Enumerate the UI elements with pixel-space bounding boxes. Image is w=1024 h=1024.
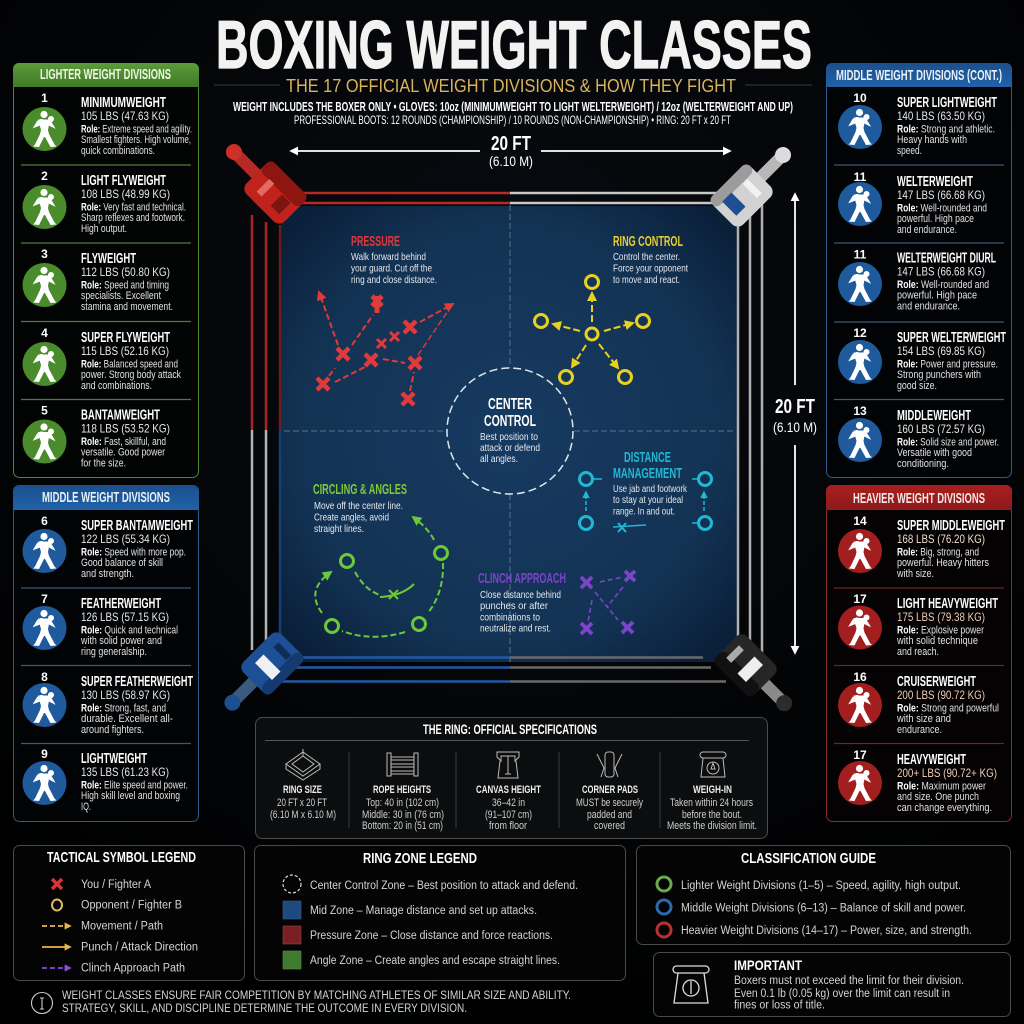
division 7: featherweight: 7 bbox=[41, 592, 48, 606]
division 4: super flyweight bbox=[22, 326, 181, 392]
legend: clinch approach path: Clinch Approach Path bbox=[81, 962, 185, 974]
footer note: WEIGHT CLASSES ENSURE FAIR COMPETITION BY MATCHING ATHLETES OF SIMILAR SIZE AND ABILITY. bbox=[62, 990, 571, 1002]
division 11: welterweight: 11 bbox=[854, 170, 867, 184]
legend: punch direction: Punch / Attack Direction bbox=[81, 942, 198, 954]
division 7: featherweight: with solid power and bbox=[80, 635, 162, 647]
panel: lighter weight divisions bbox=[13, 63, 199, 478]
division 17: heavyweight: Role: Maximum power bbox=[897, 780, 986, 792]
division 7: featherweight: FEATHERWEIGHT bbox=[81, 596, 161, 612]
legend: you / fighter a: You / Fighter A bbox=[81, 879, 151, 891]
division 7: featherweight: 126 LBS (57.15 KG) bbox=[81, 610, 169, 624]
division 6: super bantamweight: SUPER BANTAMWEIGHT bbox=[81, 518, 193, 534]
spec: canvas height bbox=[476, 752, 541, 832]
ring control diagram bbox=[534, 276, 650, 384]
spec: corner pads: covered bbox=[594, 820, 625, 832]
tactic: clinch approach: Close distance behind bbox=[480, 589, 561, 601]
division 13: middleweight: 160 LBS (72.57 KG) bbox=[897, 422, 985, 436]
division 10: super lightweight: speed. bbox=[897, 145, 922, 157]
tactic: distance management: Use jab and footwork bbox=[613, 483, 688, 495]
guide: lighter: Lighter Weight Divisions (1–5) – Speed, agility, high output. bbox=[681, 880, 961, 892]
tactic: clinch approach bbox=[478, 571, 635, 634]
tactic: pressure: Walk forward behind bbox=[351, 251, 426, 263]
distance diagram bbox=[580, 472, 712, 532]
panel: heavier weight divisions bbox=[826, 485, 1012, 822]
zone: pressure bbox=[283, 926, 553, 944]
panel: ring zone legend bbox=[254, 846, 626, 980]
callout: important: fines or loss of title. bbox=[734, 1000, 825, 1012]
division 11: welterweight: Role: Well-rounded and bbox=[897, 202, 987, 214]
division 1: minimumweight: Role: Extreme speed and agility. bbox=[81, 124, 192, 136]
division 8: super featherweight: SUPER FEATHERWEIGHT bbox=[81, 674, 193, 690]
division 11: welterweight: and endurance. bbox=[897, 224, 957, 236]
spec: ring size bbox=[270, 749, 336, 821]
division 7: featherweight: Role: Quick and technical bbox=[81, 624, 178, 636]
division 9: lightweight bbox=[22, 747, 188, 813]
spec: canvas height: (91–107 cm) bbox=[485, 809, 532, 821]
footer note bbox=[32, 990, 571, 1015]
division 2: light flyweight: 108 LBS (48.99 KG) bbox=[81, 187, 170, 201]
zone: center control: Center Control Zone – Best position to attack and defend. bbox=[310, 880, 578, 892]
corner post: white bbox=[708, 134, 804, 230]
panel: middle weight divisions: MIDDLE WEIGHT DIVISIONS bbox=[42, 490, 170, 506]
legend: movement path bbox=[42, 920, 163, 932]
division 13: middleweight: MIDDLEWEIGHT bbox=[897, 408, 971, 424]
tactic: clinch approach: neutralize and rest. bbox=[480, 622, 551, 634]
division 3: flyweight: specialists. Excellent bbox=[81, 290, 161, 302]
division 13: middleweight: Role: Solid size and power. bbox=[897, 436, 999, 448]
division 9: lightweight: IQ. bbox=[81, 801, 91, 813]
division 16: cruiserweight: 200 LBS (90.72 KG) bbox=[897, 688, 985, 702]
tactic: pressure: your guard. Cut off the bbox=[351, 262, 432, 274]
division 15: light heavyweight: Role: Explosive power bbox=[897, 624, 984, 636]
division 17: heavyweight: and size. One punch bbox=[897, 791, 979, 803]
division 7: featherweight bbox=[22, 592, 178, 658]
zone: angle: Angle Zone – Create angles and escape straight lines. bbox=[310, 955, 560, 967]
division 7: featherweight: ring generalship. bbox=[81, 646, 147, 658]
division 17: heavyweight: HEAVYWEIGHT bbox=[897, 752, 966, 768]
division 1: minimumweight: MINIMUMWEIGHT bbox=[81, 95, 166, 111]
division 4: super flyweight: SUPER FLYWEIGHT bbox=[81, 330, 170, 346]
panel: classification guide: CLASSIFICATION GUIDE bbox=[741, 850, 876, 867]
centre control zone: Best position to bbox=[480, 431, 538, 443]
division 11 repeat: welterweight: Role: Well-rounded and bbox=[897, 279, 989, 291]
legend: opponent / fighter b: Opponent / Fighter B bbox=[81, 900, 182, 912]
division 11: welterweight: powerful. High pace bbox=[897, 213, 974, 225]
division 13: middleweight: Versatile with good bbox=[897, 447, 972, 459]
division 14: super middleweight bbox=[838, 514, 1005, 580]
division 11 repeat: welterweight bbox=[838, 248, 996, 312]
ring canvas bbox=[281, 206, 737, 662]
tactic: ring control: RING CONTROL bbox=[613, 234, 683, 250]
legend: you / fighter a bbox=[52, 879, 151, 891]
division 13: middleweight bbox=[838, 404, 999, 470]
division 3: flyweight bbox=[22, 247, 173, 313]
division 11: welterweight: 147 LBS (66.68 KG) bbox=[897, 188, 985, 202]
ring ropes bbox=[252, 193, 762, 682]
spec: ring size: 20 FT x 20 FT bbox=[277, 797, 327, 809]
tactic: circling and angles bbox=[313, 482, 448, 637]
callout: important: Even 0.1 lb (0.05 kg) over the limit can result in bbox=[734, 988, 950, 1000]
callout: important: Boxers must not exceed the limit for their division. bbox=[734, 975, 964, 987]
subtitle: THE 17 OFFICIAL WEIGHT DIVISIONS & HOW THEY FIGHT bbox=[286, 76, 736, 96]
panel: classification guide bbox=[636, 846, 1010, 944]
tactic: distance management: DISTANCE bbox=[624, 450, 671, 466]
division 3: flyweight: FLYWEIGHT bbox=[81, 251, 136, 267]
division 14: super middleweight: 168 LBS (76.20 KG) bbox=[897, 532, 985, 546]
division 13: middleweight: 13 bbox=[853, 404, 867, 418]
icon: info bbox=[32, 992, 52, 1014]
panel: official ring specifications: THE RING: OFFICIAL SPECIFICATIONS bbox=[423, 721, 597, 737]
division 14: super middleweight: powerful. Heavy hitters bbox=[897, 557, 989, 569]
spec: rope heights: Bottom: 20 in (51 cm) bbox=[362, 820, 443, 832]
icon: scale bbox=[673, 966, 709, 1003]
division 2: light flyweight bbox=[22, 169, 186, 235]
division 4: super flyweight: power. Strong body attack bbox=[81, 369, 181, 381]
clinch diagram bbox=[581, 571, 635, 634]
spec: canvas height: CANVAS HEIGHT bbox=[476, 784, 541, 796]
division 17: heavyweight bbox=[838, 748, 997, 814]
division 16: cruiserweight: endurance. bbox=[897, 724, 942, 736]
division 2: light flyweight: Role: Very fast and technical. bbox=[81, 202, 186, 214]
circling diagram bbox=[315, 517, 448, 637]
pressure diagram bbox=[317, 292, 453, 405]
spec: corner pads: padded and bbox=[587, 809, 632, 821]
division 16: cruiserweight: Role: Strong and powerful bbox=[897, 702, 999, 714]
division 11: welterweight: WELTERWEIGHT bbox=[897, 174, 973, 190]
division 11: welterweight bbox=[838, 170, 987, 236]
division 15: light heavyweight: 17 bbox=[853, 592, 867, 606]
callout: important bbox=[654, 952, 1010, 1016]
centre control zone: attack or defend bbox=[480, 442, 540, 454]
centre control zone: CENTER bbox=[488, 396, 532, 413]
division 2: light flyweight: High output. bbox=[81, 223, 127, 235]
division 1: minimumweight: quick combinations. bbox=[81, 145, 155, 157]
dimension: horizontal 20 ft bbox=[291, 133, 730, 169]
tactic: clinch approach: CLINCH APPROACH bbox=[478, 571, 566, 587]
division 16: cruiserweight: 16 bbox=[853, 670, 867, 684]
division 11 repeat: welterweight: 147 LBS (66.68 KG) bbox=[897, 264, 985, 278]
spec: weigh-in: Taken within 24 hours bbox=[670, 797, 753, 809]
panel: official ring specifications bbox=[256, 718, 768, 838]
division 16: cruiserweight: CRUISERWEIGHT bbox=[897, 674, 976, 690]
division 8: super featherweight: durable. Excellent all- bbox=[81, 713, 173, 725]
division 4: super flyweight: and combinations. bbox=[81, 380, 152, 392]
division 12: super welterweight: Strong punchers with bbox=[897, 369, 981, 381]
division 8: super featherweight: around fighters. bbox=[81, 724, 144, 736]
division 3: flyweight: Role: Speed and timing bbox=[81, 280, 169, 292]
division 10: super lightweight: Heavy hands with bbox=[897, 134, 967, 146]
dimension: vertical 20 ft: 20 FT bbox=[775, 396, 815, 418]
tactic: ring control bbox=[534, 234, 688, 384]
tactic: ring control: Force your opponent bbox=[613, 262, 688, 274]
division 4: super flyweight: 4 bbox=[41, 326, 48, 340]
division 1: minimumweight: 105 LBS (47.63 KG) bbox=[81, 109, 169, 123]
guide: middle: Middle Weight Divisions (6–13) – Balance of skill and power. bbox=[681, 902, 966, 914]
centre control zone: CONTROL bbox=[484, 413, 536, 430]
division 16: cruiserweight: with size and bbox=[896, 713, 951, 725]
ring centre lines bbox=[284, 205, 735, 662]
panel: tactical symbol legend: TACTICAL SYMBOL LEGEND bbox=[47, 849, 196, 866]
corner post: blue bbox=[212, 629, 306, 723]
spec: ring size: (6.10 M x 6.10 M) bbox=[270, 809, 336, 821]
zone: angle bbox=[283, 951, 560, 969]
tactic: pressure bbox=[317, 234, 453, 405]
tactic: ring control: Control the center. bbox=[613, 251, 680, 263]
tactic: clinch approach: punches or after bbox=[480, 600, 548, 612]
tactic: clinch approach: combinations to bbox=[480, 612, 540, 624]
division 14: super middleweight: Role: Big, strong, and bbox=[897, 546, 979, 558]
tactic: ring control: to move and react. bbox=[613, 274, 680, 286]
division 17: heavyweight: can change everything. bbox=[897, 802, 992, 814]
spec: weigh-in: before the bout. bbox=[682, 809, 742, 821]
division 11 repeat: welterweight: powerful. High pace bbox=[897, 290, 977, 302]
division 5: bantamweight: for the size. bbox=[81, 458, 126, 470]
division 9: lightweight: 135 LBS (61.23 KG) bbox=[81, 765, 169, 779]
division 11 repeat: welterweight: 11 bbox=[854, 248, 867, 262]
division 12: super welterweight: 154 LBS (69.85 KG) bbox=[897, 344, 985, 358]
dimension: horizontal 20 ft: 20 FT bbox=[491, 133, 531, 155]
zone: mid bbox=[283, 901, 537, 919]
spec: weigh-in: Meets the division limit. bbox=[667, 820, 757, 832]
division 3: flyweight: 112 LBS (50.80 KG) bbox=[81, 265, 170, 279]
centre control zone: all angles. bbox=[480, 453, 518, 465]
spec: canvas height: from floor bbox=[489, 820, 527, 832]
division 1: minimumweight: Smallest fighters. High volume, bbox=[81, 134, 191, 146]
tactic: pressure: PRESSURE bbox=[351, 234, 400, 250]
panel: ring zone legend: RING ZONE LEGEND bbox=[363, 850, 477, 867]
division 12: super welterweight: Role: Power and pressure. bbox=[897, 358, 998, 370]
division 6: super bantamweight bbox=[22, 514, 193, 580]
division 2: light flyweight: Sharp reflexes and footwork. bbox=[81, 212, 185, 224]
division 5: bantamweight bbox=[22, 404, 170, 470]
division 2: light flyweight: LIGHT FLYWEIGHT bbox=[81, 173, 166, 189]
division 1: minimumweight bbox=[22, 91, 192, 157]
division 16: cruiserweight bbox=[838, 670, 999, 736]
division 4: super flyweight: 115 LBS (52.16 KG) bbox=[81, 344, 169, 358]
division 17: heavyweight: 17 bbox=[853, 748, 867, 762]
corner post: black bbox=[712, 631, 805, 724]
spec: corner pads: MUST be securely bbox=[576, 797, 643, 809]
guide: heavier: Heavier Weight Divisions (14–17) – Power, size, and strength. bbox=[681, 925, 972, 937]
division 6: super bantamweight: Role: Speed with more pop. bbox=[81, 546, 186, 558]
tactic: distance management: to stay at your ideal bbox=[613, 494, 683, 506]
division 10: super lightweight bbox=[838, 91, 997, 157]
panel: boxing ring bbox=[212, 131, 805, 724]
division 6: super bantamweight: and strength. bbox=[81, 568, 134, 580]
division 6: super bantamweight: Good balance of skill bbox=[81, 557, 163, 569]
spec: canvas height: 36–42 in bbox=[492, 797, 525, 809]
division 11 repeat: welterweight: and endurance. bbox=[897, 300, 960, 312]
division 3: flyweight: 3 bbox=[41, 247, 48, 261]
division 9: lightweight: High skill level and boxing bbox=[81, 790, 180, 802]
panel: lighter weight divisions: LIGHTER WEIGHT DIVISIONS bbox=[40, 67, 171, 83]
division 3: flyweight: stamina and movement. bbox=[81, 301, 173, 313]
division 12: super welterweight bbox=[838, 326, 1006, 392]
division 13: middleweight: conditioning. bbox=[897, 458, 949, 470]
division 6: super bantamweight: 122 LBS (55.34 KG) bbox=[81, 532, 170, 546]
spec: rope heights: Top: 40 in (102 cm) bbox=[366, 797, 439, 809]
centre control zone bbox=[447, 368, 573, 494]
tactic: distance management: MANAGEMENT bbox=[613, 466, 682, 482]
division 15: light heavyweight: with solid technique bbox=[896, 635, 978, 647]
rules summary text bbox=[233, 100, 793, 127]
division 1: minimumweight: 1 bbox=[41, 91, 48, 105]
rules summary text: PROFESSIONAL BOOTS: 12 ROUNDS (CHAMPIONSHIP) / 10 ROUNDS (NON-CHAMPIONSHIP) • RING: 20 FT x 20 FT bbox=[294, 113, 731, 127]
division 8: super featherweight: Role: Strong, fast, and bbox=[81, 702, 166, 714]
panel: middle weight divisions continued bbox=[826, 63, 1012, 478]
division 5: bantamweight: Role: Fast, skillful, and bbox=[81, 436, 166, 448]
spec: rope heights bbox=[362, 753, 444, 832]
division 17: heavyweight: 200+ LBS (90.72+ KG) bbox=[897, 766, 997, 780]
division 14: super middleweight: 14 bbox=[853, 514, 867, 528]
division 8: super featherweight bbox=[22, 670, 193, 736]
legend: movement path: Movement / Path bbox=[81, 920, 163, 932]
panel: middle weight divisions bbox=[13, 485, 199, 822]
division 14: super middleweight: with size. bbox=[896, 568, 934, 580]
division 12: super welterweight: 12 bbox=[853, 326, 867, 340]
division 5: bantamweight: 118 LBS (53.52 KG) bbox=[81, 422, 170, 436]
spec: rope heights: ROPE HEIGHTS bbox=[373, 784, 431, 796]
spec: corner pads bbox=[576, 752, 643, 832]
division 10: super lightweight: 140 LBS (63.50 KG) bbox=[897, 109, 985, 123]
division 6: super bantamweight: 6 bbox=[41, 514, 48, 528]
division 12: super welterweight: good size. bbox=[897, 380, 937, 392]
division 5: bantamweight: BANTAMWEIGHT bbox=[81, 408, 160, 424]
zone: mid: Mid Zone – Manage distance and set up attacks. bbox=[310, 905, 537, 917]
division 15: light heavyweight: 175 LBS (79.38 KG) bbox=[897, 610, 985, 624]
spec: rope heights: Middle: 30 in (76 cm) bbox=[362, 809, 444, 821]
dimension: vertical 20 ft bbox=[773, 194, 817, 653]
division 4: super flyweight: Role: Balanced speed and bbox=[81, 358, 178, 370]
division 5: bantamweight: versatile. Good power bbox=[81, 446, 165, 458]
zone: center control bbox=[283, 875, 578, 893]
spec: corner pads: CORNER PADS bbox=[582, 784, 638, 796]
footer note: STRATEGY, SKILL, AND DISCIPLINE DETERMINE THE OUTCOME IN EVERY DIVISION. bbox=[62, 1003, 467, 1015]
panel: tactical symbol legend bbox=[14, 846, 244, 980]
dimension: horizontal 20 ft: (6.10 M) bbox=[489, 154, 533, 169]
division 15: light heavyweight: and reach. bbox=[897, 646, 939, 658]
callout: important: IMPORTANT bbox=[734, 957, 802, 973]
corner post: red bbox=[213, 131, 309, 227]
guide: lighter bbox=[657, 877, 961, 892]
tactic: distance management bbox=[580, 450, 712, 532]
division 9: lightweight: 9 bbox=[41, 747, 48, 761]
tactic: distance management: range. In and out. bbox=[613, 506, 675, 518]
division 9: lightweight: Role: Elite speed and power. bbox=[81, 780, 188, 792]
zone: pressure: Pressure Zone – Close distance and force reactions. bbox=[310, 930, 553, 942]
spec: weigh-in: WEIGH-IN bbox=[693, 784, 732, 796]
tactic: circling and angles: Create angles, avoid bbox=[314, 512, 389, 524]
spec: weigh-in bbox=[667, 752, 757, 832]
division 2: light flyweight: 2 bbox=[41, 169, 48, 183]
division 5: bantamweight: 5 bbox=[41, 404, 48, 418]
tactic: circling and angles: Move off the center line. bbox=[314, 500, 403, 512]
tactic: pressure: ring and close distance. bbox=[351, 274, 437, 286]
division 15: light heavyweight bbox=[838, 592, 998, 658]
spec: ring size: RING SIZE bbox=[283, 784, 322, 796]
tactic: circling and angles: CIRCLING & ANGLES bbox=[313, 482, 407, 498]
division 10: super lightweight: 10 bbox=[853, 91, 867, 105]
division 9: lightweight: LIGHTWEIGHT bbox=[81, 751, 147, 767]
dimension: vertical 20 ft: (6.10 M) bbox=[773, 420, 817, 435]
division 8: super featherweight: 130 LBS (58.97 KG) bbox=[81, 688, 170, 702]
division 8: super featherweight: 8 bbox=[41, 670, 48, 684]
tactic: circling and angles: straight lines. bbox=[314, 523, 364, 535]
division 10: super lightweight: Role: Strong and athletic. bbox=[897, 124, 995, 136]
